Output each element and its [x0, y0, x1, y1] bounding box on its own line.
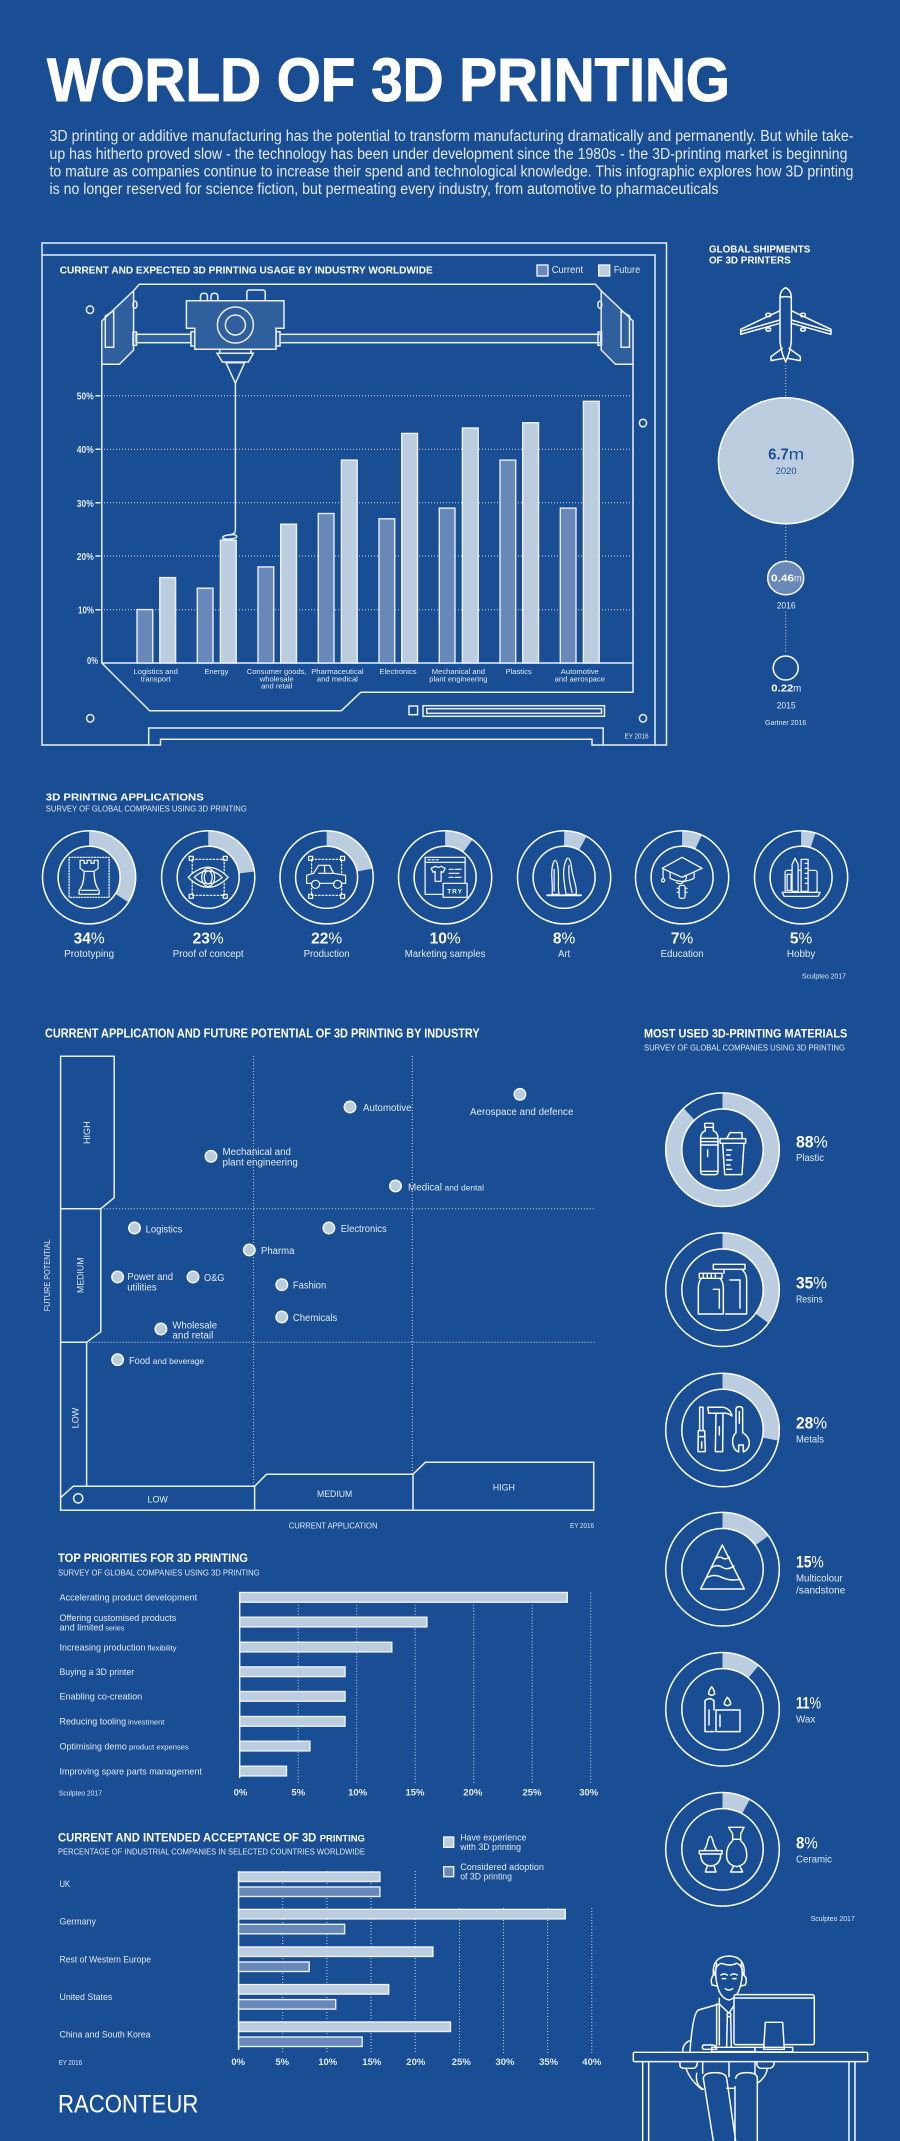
intro paragraph	[50, 128, 854, 198]
bubble: 2016: m	[794, 574, 802, 585]
source: EY 2016	[59, 2058, 82, 2067]
matrix heading: CURRENT APPLICATION AND FUTURE POTENTIAL OF 3D PRINTING BY INDUSTRY	[45, 1027, 480, 1041]
source: Sculpteo 2017	[802, 972, 846, 980]
category labels: Reducing tooling	[60, 1717, 126, 1728]
priorities subheading: SURVEY OF GLOBAL COMPANIES USING 3D PRINTING	[58, 1568, 260, 1577]
bars	[239, 1872, 565, 2046]
industry labels: Energy	[204, 667, 229, 676]
axis values: 35%	[539, 2057, 559, 2068]
materials heading: MOST USED 3D-PRINTING MATERIALS	[644, 1028, 848, 1040]
industry labels: Consumer goods,	[247, 667, 307, 676]
legend: Have experience	[460, 1833, 526, 1844]
connector lines	[785, 362, 787, 653]
panel: most used materials	[644, 1028, 855, 1923]
donut: wax: 11%	[796, 1694, 821, 1713]
donut: multicolour sandstone	[666, 1512, 845, 1626]
donut: multicolour sandstone: /sandstone	[796, 1584, 845, 1596]
panel: current application and future potential matrix	[42, 1027, 595, 1530]
panel: acceptance bar chart	[58, 1833, 602, 2068]
donut: production: 22%	[311, 930, 342, 947]
applications heading: 3D PRINTING APPLICATIONS	[46, 792, 204, 804]
donut: plastic: 88%	[796, 1132, 828, 1151]
industry labels: Plastics	[506, 667, 532, 676]
shipments heading	[709, 244, 811, 266]
donut: art	[518, 831, 611, 960]
industry labels: and aerospace	[555, 674, 605, 684]
panel: 3D printing applications	[42, 792, 848, 980]
axis values: 15%	[362, 2057, 382, 2068]
donut: metals	[666, 1373, 827, 1487]
axis labels: LOW	[148, 1494, 168, 1506]
donut: multicolour sandstone: 15%	[796, 1553, 824, 1572]
donut: resins	[666, 1233, 827, 1346]
data points: and beverage	[153, 1357, 205, 1366]
donut: wax: Wax	[796, 1713, 816, 1725]
axis labels: LOW	[70, 1408, 81, 1428]
source: Sculpteo 2017	[59, 1788, 102, 1797]
donut: hobby: 5%	[790, 930, 813, 947]
axis values: 0%	[234, 1788, 248, 1798]
axis values: 40%	[582, 2057, 602, 2068]
axis values: 30%	[579, 1788, 599, 1798]
country labels: China and South Korea	[60, 2029, 151, 2040]
bubble: 2020	[718, 398, 853, 524]
country labels: United States	[60, 1992, 113, 2003]
acceptance heading: CURRENT AND INTENDED ACCEPTANCE OF 3D	[58, 1833, 316, 1845]
bubble: 2015: 0.22	[771, 683, 793, 695]
donut: marketing samples: 10%	[430, 930, 461, 947]
bubble: 2016: 2016	[777, 601, 796, 611]
axis values: 15%	[405, 1788, 425, 1798]
intro paragraph: 3D printing or additive manufacturing has the potential to transform manufacturing dramatically and permanently. But while take-	[50, 128, 854, 145]
legend	[444, 1833, 544, 1882]
category labels: Enabling co-creation	[60, 1692, 142, 1703]
axis labels: EY 2016	[570, 1521, 594, 1530]
category labels: Increasing production	[60, 1643, 146, 1654]
data points: Electronics	[341, 1224, 387, 1235]
donut: education: Education	[661, 948, 704, 960]
category labels: investment	[128, 1718, 165, 1727]
donut: proof of concept: 23%	[193, 930, 224, 947]
axis labels: HIGH	[82, 1121, 93, 1144]
industry labels: Electronics	[379, 667, 417, 676]
category labels: Optimising demo	[60, 1742, 127, 1753]
intro paragraph: is no longer reserved for science fiction, but permeating every industry, from automotive to pharmaceuticals	[50, 181, 719, 198]
axis labels: MEDIUM	[75, 1257, 86, 1293]
data points: plant engineering	[222, 1158, 298, 1169]
industry labels: transport	[141, 674, 172, 684]
donut: art: 8%	[553, 930, 576, 947]
donut: prototyping	[42, 831, 136, 960]
country labels: Germany	[60, 1917, 96, 1928]
bubble: 2016	[768, 561, 804, 611]
data points: Fashion	[293, 1281, 326, 1292]
bars	[240, 1592, 567, 1776]
priorities heading: TOP PRIORITIES FOR 3D PRINTING	[58, 1553, 248, 1565]
donut: wax	[666, 1652, 821, 1766]
donut: education: 7%	[671, 930, 694, 947]
panel: top priorities bar chart	[58, 1553, 599, 1798]
donut: marketing samples	[398, 831, 492, 960]
bubble: 2015	[771, 656, 802, 710]
axis labels: FUTURE POTENTIAL	[42, 1239, 52, 1311]
industry labels	[134, 667, 605, 690]
donut: metals: Metals	[796, 1434, 824, 1446]
donut: ceramic: Ceramic	[796, 1854, 832, 1866]
legend: Current	[552, 265, 583, 276]
icon: aeroplane	[741, 288, 831, 362]
y-axis ticks and gridlines: 50%	[77, 392, 94, 402]
donut: proof of concept: Proof of concept	[173, 948, 244, 960]
country labels: Rest of Western Europe	[60, 1954, 151, 1965]
source: EY 2016	[624, 732, 648, 740]
matrix axes	[61, 1056, 594, 1510]
category labels: and limited	[60, 1622, 104, 1633]
donut: plastic: Plastic	[796, 1152, 824, 1164]
y-axis ticks and gridlines: 30%	[77, 499, 94, 510]
axis labels: MEDIUM	[317, 1489, 352, 1500]
data points: and dental	[444, 1184, 484, 1193]
donut: ceramic	[666, 1792, 832, 1906]
axis values: 20%	[463, 1788, 483, 1798]
axis values: 10%	[318, 2057, 338, 2068]
legend: Future	[614, 265, 641, 276]
axis values	[231, 2057, 602, 2068]
axis values: 25%	[452, 2057, 471, 2068]
source: Sculpteo 2017	[811, 1914, 855, 1923]
donut: plastic	[666, 1093, 828, 1206]
data points: Logistics	[146, 1225, 182, 1236]
donut: prototyping: 34%	[74, 930, 105, 947]
bubble: 2020: 6.7	[768, 446, 789, 463]
axis labels: CURRENT APPLICATION	[289, 1520, 378, 1530]
bubble: 2016: 0.46	[771, 574, 795, 585]
data points: Food	[129, 1356, 150, 1367]
industry labels: Mechanical and	[432, 667, 485, 676]
data points: Wholesale	[172, 1320, 218, 1331]
data points: Aerospace and defence	[470, 1107, 574, 1118]
donut: resins: 35%	[796, 1273, 827, 1292]
country labels	[60, 1879, 151, 2040]
axis labels: HIGH	[493, 1482, 515, 1494]
donut: education	[636, 831, 729, 960]
donut: hobby	[754, 831, 848, 960]
data points: O&G	[204, 1273, 225, 1284]
donut: prototyping: Prototyping	[64, 948, 114, 960]
category labels: product expenses	[129, 1743, 189, 1752]
donut: marketing samples: TRY	[447, 888, 463, 895]
industry labels: Pharmaceutical	[311, 667, 364, 676]
legend: with 3D printing	[459, 1842, 521, 1853]
panel: usage by industry printer chart	[42, 243, 666, 745]
data points: Automotive	[363, 1103, 412, 1114]
acceptance subheading: PERCENTAGE OF INDUSTRIAL COMPANIES IN SELECTED COUNTRIES WORLDWIDE	[58, 1847, 365, 1856]
category labels: Accelerating product development	[60, 1593, 198, 1604]
logo: Raconteur: RACONTEUR	[58, 2090, 198, 2118]
industry labels: Automotive	[561, 667, 599, 676]
donut: ceramic: 8%	[796, 1834, 818, 1853]
materials subheading: SURVEY OF GLOBAL COMPANIES USING 3D PRINTING	[644, 1043, 845, 1052]
panel: global shipments	[709, 244, 853, 727]
illustration: man at desk	[633, 1956, 868, 2141]
shipments heading: OF 3D PRINTERS	[709, 256, 791, 266]
axis values: 10%	[348, 1788, 368, 1798]
axis values: 0%	[231, 2057, 246, 2068]
industry labels: plant engineering	[429, 674, 488, 684]
bubble: 2015: m	[793, 683, 802, 695]
data points: utilities	[127, 1282, 157, 1293]
axis values: 5%	[275, 2057, 290, 2068]
axis values: 25%	[522, 1788, 542, 1798]
acceptance heading: PRINTING	[320, 1834, 365, 1845]
axis values	[234, 1788, 599, 1798]
industry labels: wholesale	[259, 674, 294, 684]
category labels: Buying a 3D printer	[60, 1667, 134, 1678]
category labels	[60, 1593, 202, 1777]
legend	[537, 265, 641, 276]
industry labels: and medical	[317, 674, 358, 684]
axis values: 30%	[495, 2057, 515, 2068]
donut: hobby: Hobby	[787, 948, 816, 960]
data points: Mechanical and	[222, 1147, 291, 1158]
intro paragraph: up has hitherto proved slow - the technology has been under development since the 1980s - the 3D-printing market is beginning	[50, 146, 848, 163]
axis values: 5%	[291, 1788, 306, 1798]
axis labels	[42, 1121, 594, 1530]
donut: multicolour sandstone: Multicolour	[796, 1573, 843, 1585]
chart heading: CURRENT AND EXPECTED 3D PRINTING USAGE BY INDUSTRY WORLDWIDE	[60, 264, 433, 276]
legend: Considered adoption	[460, 1862, 544, 1873]
donut: metals: 28%	[796, 1414, 827, 1433]
donut: production: Production	[304, 948, 350, 960]
axis values: 20%	[406, 2057, 426, 2068]
shipments heading: GLOBAL SHIPMENTS	[709, 244, 811, 255]
y-axis ticks and gridlines: 0%	[87, 656, 98, 667]
category labels: series	[105, 1623, 125, 1632]
industry labels: and retail	[261, 682, 293, 690]
category labels: Offering customised products	[60, 1613, 176, 1624]
y-axis ticks and gridlines: 40%	[77, 445, 94, 456]
data points: Medical	[408, 1183, 442, 1194]
donut: production	[280, 831, 373, 960]
y-axis ticks and gridlines: 10%	[78, 606, 94, 616]
bubble: 2020: m	[789, 446, 804, 463]
y-axis ticks and gridlines: 20%	[77, 552, 94, 563]
data points: and retail	[172, 1331, 213, 1342]
source: Gartner 2016	[765, 718, 806, 727]
printer frame	[42, 243, 666, 745]
category labels: flexibility	[148, 1644, 177, 1653]
industry labels: Logistics and	[134, 667, 178, 676]
legend: of 3D printing	[460, 1872, 512, 1882]
data points: Pharma	[261, 1246, 295, 1257]
data points	[112, 1088, 574, 1367]
donut: proof of concept	[162, 831, 255, 960]
title: WORLD OF 3D PRINTING	[47, 46, 730, 114]
donut: art: Art	[558, 948, 570, 960]
country labels: UK	[60, 1879, 71, 1890]
donut: marketing samples: Marketing samples	[405, 948, 485, 960]
donut: resins: Resins	[796, 1293, 823, 1305]
applications subheading: SURVEY OF GLOBAL COMPANIES USING 3D PRINTING	[46, 805, 247, 814]
data points: Power and	[127, 1272, 173, 1283]
y-axis ticks and gridlines	[77, 392, 633, 667]
bar chart: current and future usage	[137, 401, 599, 663]
bubble: 2020: 2020	[776, 466, 797, 476]
printer head and gantry	[102, 284, 633, 539]
category labels: Improving spare parts management	[60, 1766, 202, 1777]
data points: Chemicals	[293, 1313, 337, 1324]
bubble: 2015: 2015	[777, 700, 796, 710]
